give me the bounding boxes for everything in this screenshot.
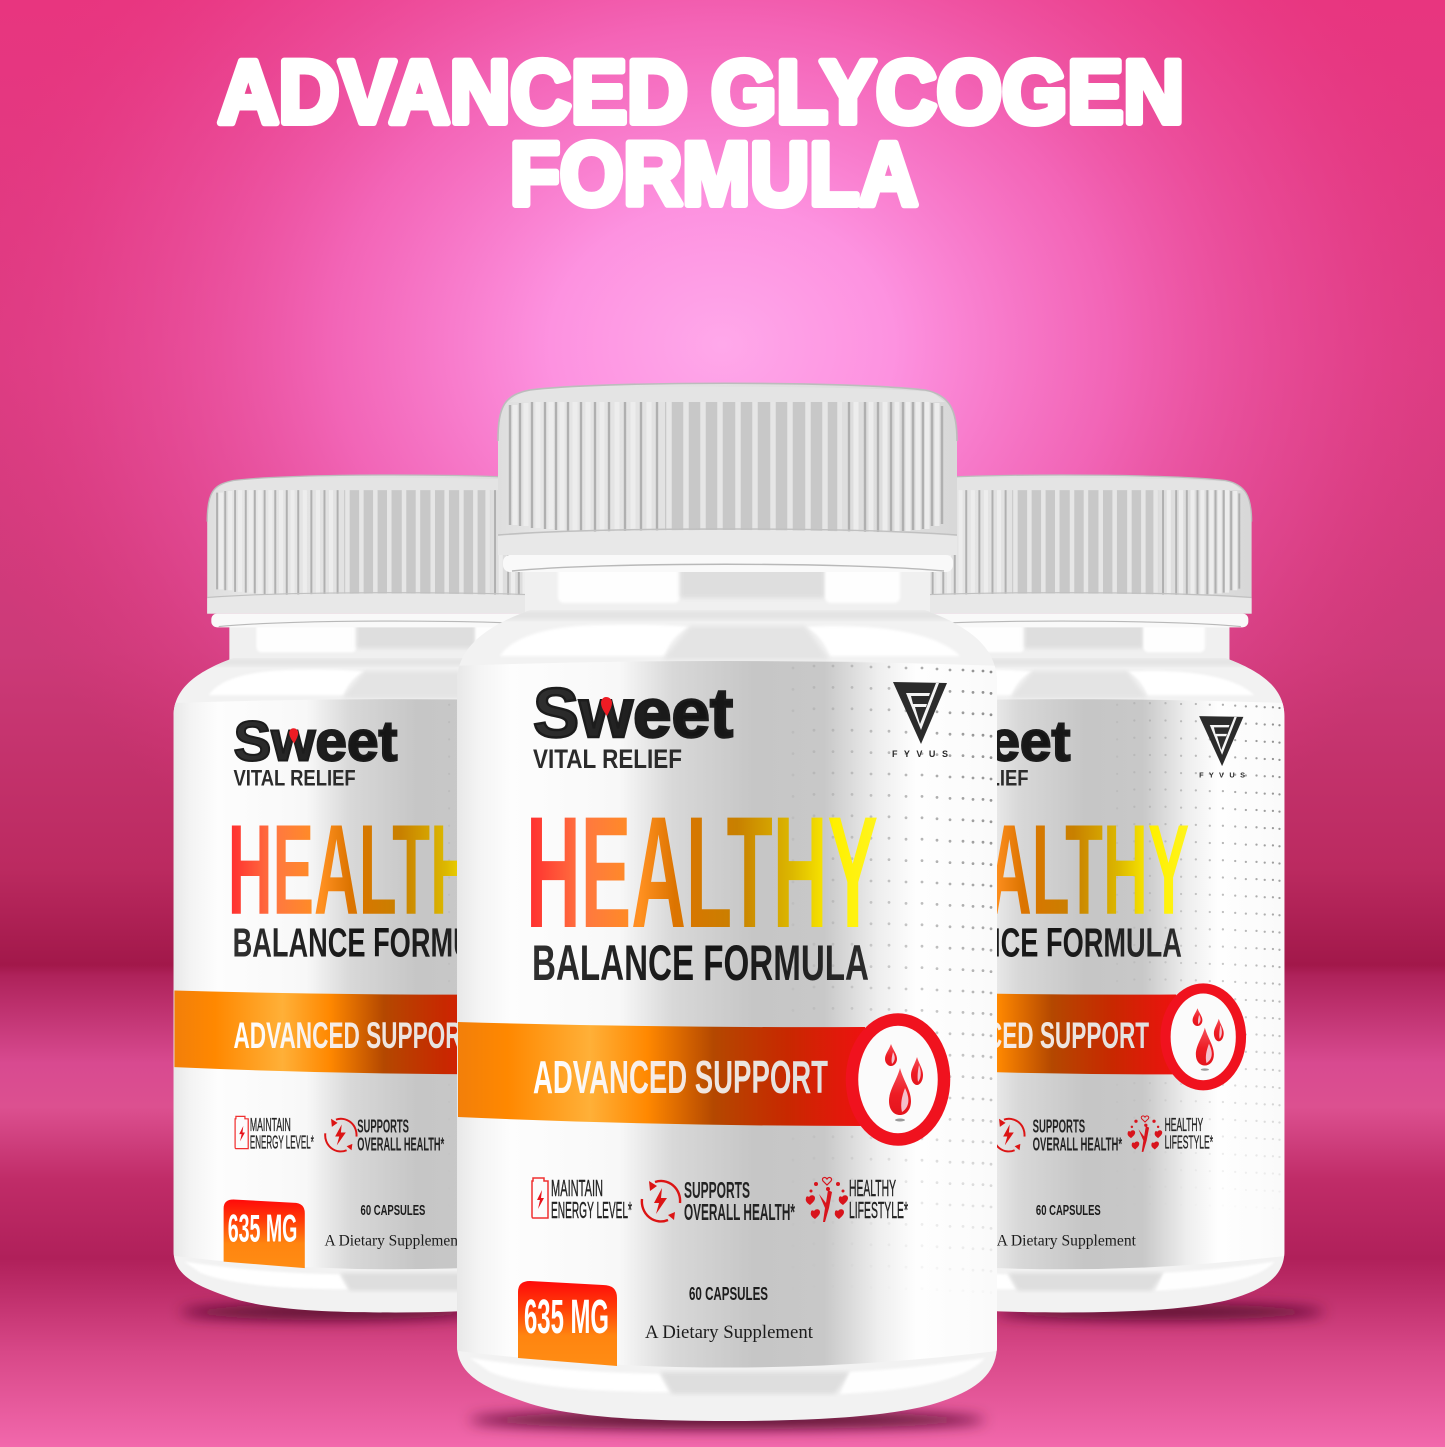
center product name: BALANCE FORMULA	[532, 935, 869, 991]
center dose: A Dietary Supplement	[645, 1322, 814, 1343]
right benefits: OVERALL HEALTH*	[1033, 1133, 1122, 1154]
center benefits: MAINTAIN	[551, 1175, 603, 1201]
left brand: VITAL RELIEF	[233, 766, 356, 790]
right product name: BALANCE FORMULA	[906, 920, 1182, 966]
left product name: BALANCE FORMULA	[233, 920, 509, 966]
center benefits: HEALTHY	[849, 1175, 896, 1201]
bottle: center	[450, 383, 1005, 1421]
left dose: 635 MG	[228, 1208, 297, 1250]
right band text: ADVANCED SUPPORT	[907, 1014, 1149, 1056]
right benefits: HEALTHY	[1165, 1114, 1203, 1135]
center brand: VITAL RELIEF	[533, 744, 682, 774]
left dose: 60 CAPSULES	[361, 1203, 425, 1219]
left benefits	[250, 1114, 445, 1154]
center bottle body and cap	[450, 383, 1005, 1421]
left benefits: SUPPORTS	[357, 1116, 409, 1136]
shadow: side bottles	[180, 1304, 1325, 1320]
left brand: Sweet	[233, 710, 397, 773]
right brand	[906, 710, 1245, 790]
center dose: 635 MG	[524, 1291, 609, 1344]
title	[218, 42, 1184, 224]
title: ADVANCED GLYCOGEN	[218, 42, 1184, 142]
right dose	[997, 1203, 1137, 1249]
center benefits: ENERGY LEVEL*	[551, 1197, 632, 1223]
center benefits	[551, 1175, 908, 1225]
title: FORMULA	[510, 124, 918, 224]
center dose: 60 CAPSULES	[689, 1284, 768, 1304]
bottle: right: LIFESTYLE*	[1165, 1132, 1213, 1153]
center benefits: OVERALL HEALTH*	[684, 1199, 795, 1225]
right brand: F Y V U S	[1199, 770, 1245, 779]
center brand: Sweet	[533, 674, 733, 752]
bottle: right	[836, 475, 1291, 1312]
right dose: A Dietary Supplement	[997, 1233, 1137, 1249]
right benefits	[1033, 1114, 1213, 1154]
center product name	[526, 783, 878, 991]
left dose	[228, 1203, 463, 1250]
bottle: left: OVERALL HEALTH*	[357, 1133, 445, 1154]
bottle: left	[168, 475, 623, 1312]
icon: red drop in logo	[601, 697, 612, 716]
bottle: center: HEALTHY	[526, 783, 878, 961]
bottle: left: HEALTHY	[228, 799, 516, 942]
left bottle body and cap	[168, 475, 623, 1312]
center band text: ADVANCED SUPPORT	[533, 1051, 828, 1103]
center benefits: SUPPORTS	[684, 1177, 750, 1203]
left band text: ADVANCED SUPPORT	[233, 1014, 475, 1056]
right benefits: SUPPORTS	[1033, 1116, 1085, 1136]
FYVUS wordmark: F Y V U S	[892, 749, 948, 759]
right dose: 60 CAPSULES	[1036, 1203, 1101, 1219]
right brand: VITAL RELIEF	[906, 766, 1029, 790]
left product name	[228, 799, 516, 966]
left benefits: MAINTAIN	[250, 1114, 291, 1135]
bottle: center: LIFESTYLE*	[849, 1197, 908, 1223]
right brand: Sweet	[906, 710, 1070, 773]
left benefits: ENERGY LEVEL*	[250, 1132, 314, 1153]
center dose	[524, 1284, 814, 1344]
right bottle body and cap	[836, 475, 1291, 1312]
right product name	[901, 799, 1189, 966]
shadow: center bottle	[469, 1411, 985, 1429]
left dose: A Dietary Supplement	[324, 1233, 463, 1249]
